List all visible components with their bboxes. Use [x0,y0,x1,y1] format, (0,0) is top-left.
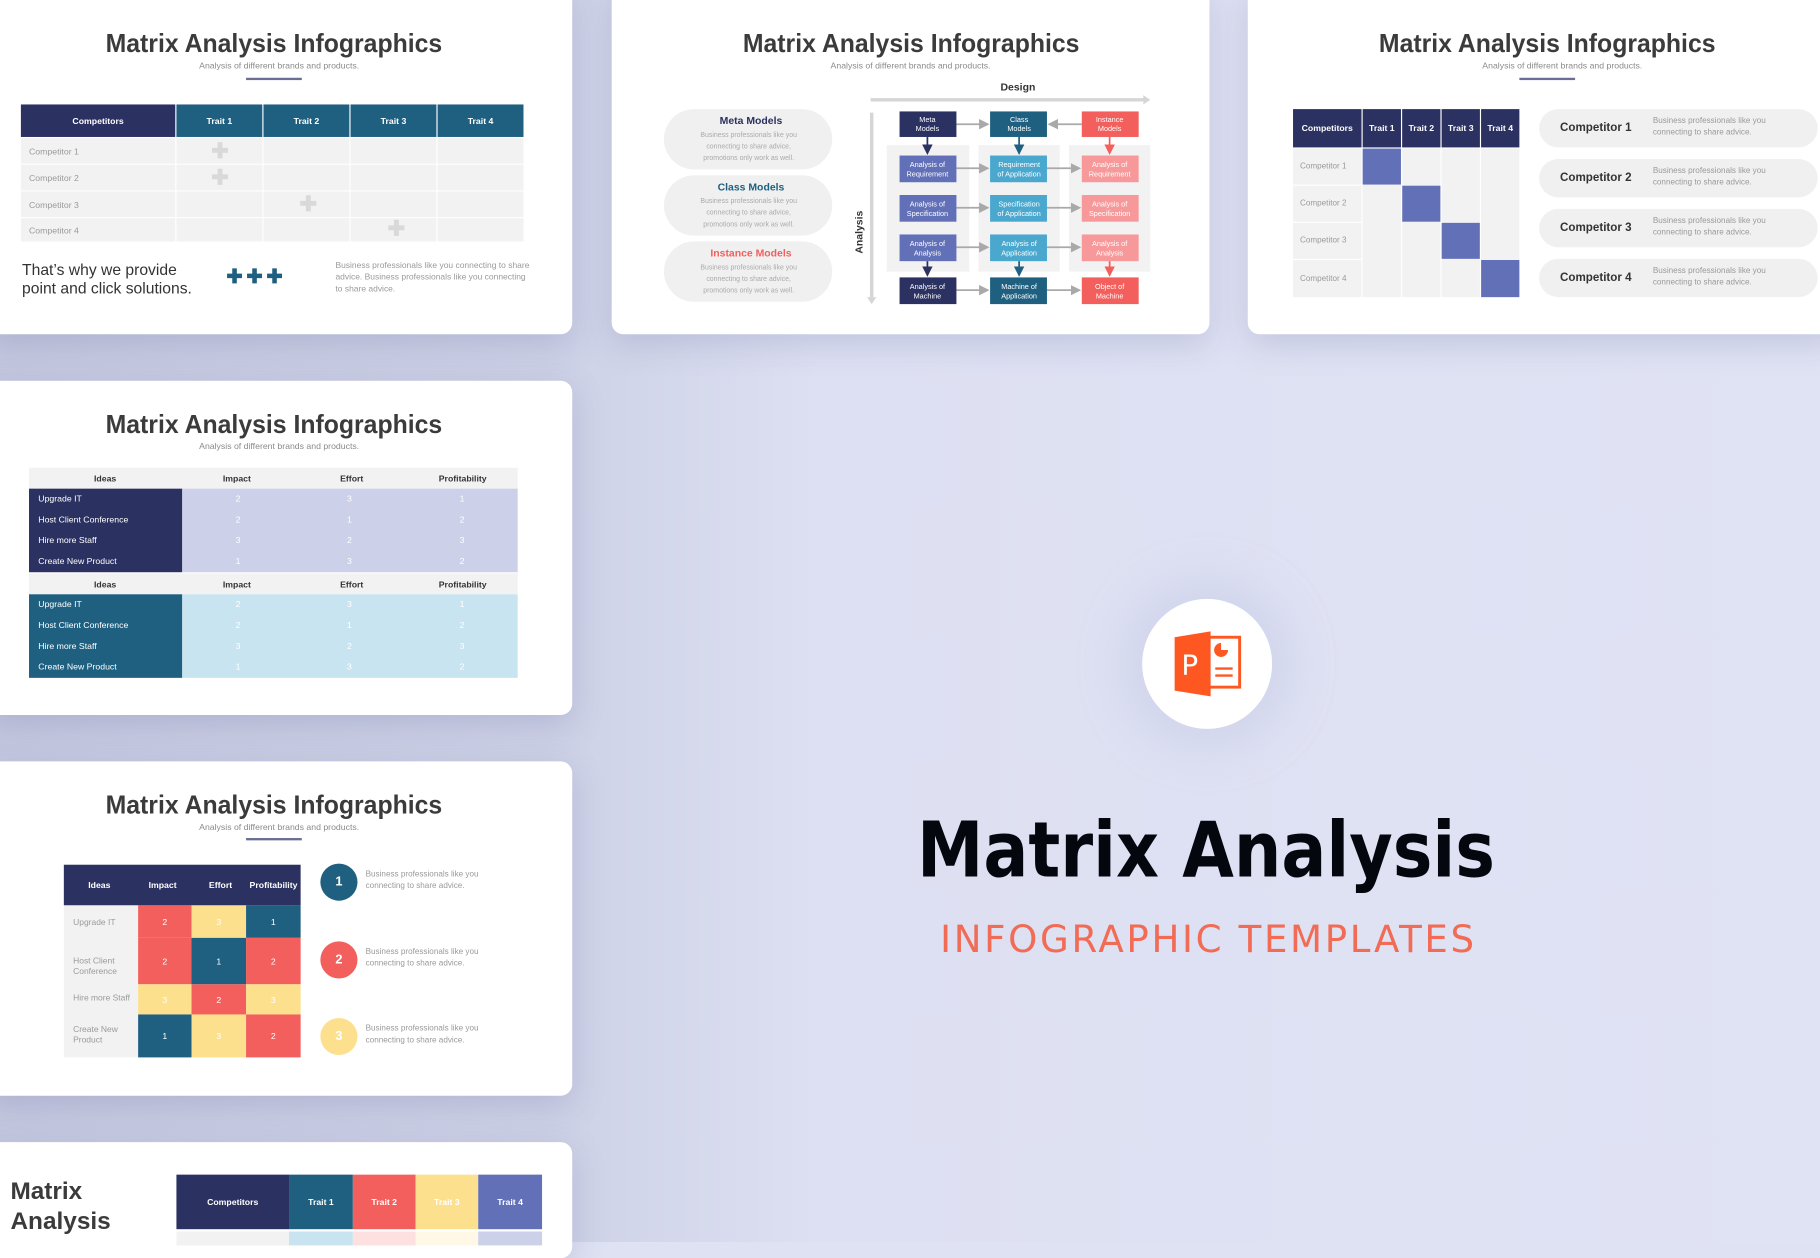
pill: Instance Models: Business professionals like you [700,264,797,271]
table: ideas teal: Create New Product [38,662,117,672]
column 3 boxes: Instance [1096,115,1123,124]
table: colored matrix: Impact [149,880,177,890]
column 2 boxes: of Application [997,169,1041,178]
table header colored: Trait 2 [371,1197,397,1207]
panel: card 5 colored ideas matrix [0,761,572,1096]
pill: Instance Models: connecting to share advice, [706,276,791,283]
column 3 boxes [1082,111,1139,304]
text: description: Business professionals like you connecting to share advice. Business professionals like you connecting to share advice. [335,260,529,294]
table: ideas navy: Effort [340,474,363,484]
pill: Meta Models: promotions only work as well. [703,155,794,162]
list: competitor pills: Business professionals like you connecting to share advice. [1653,217,1766,237]
title block [1379,30,1716,80]
table: ideas teal [29,574,518,678]
table: ideas navy: 2 [460,556,464,566]
table: ideas teal: 2 [460,662,464,672]
pill: Meta Models: connecting to share advice, [706,144,791,151]
column 3 boxes: Machine [1096,291,1123,300]
table: colored matrix: 3 [216,916,221,927]
table: ideas teal: Profitability [439,579,487,590]
column 1 boxes: Analysis of [910,282,946,291]
table: ideas navy: 3 [460,535,464,546]
title: Matrix Analysis [10,1178,111,1235]
icon: PowerPoint badge: P [1181,648,1198,681]
table: ideas teal: Ideas [94,579,116,590]
column 3 boxes: Models [1098,124,1122,133]
pill: Instance Models [664,241,832,302]
table: ideas teal: 1 [236,662,240,672]
table: colored matrix [64,864,301,1058]
table: colored matrix: Create New [73,1024,118,1034]
table: ideas teal: 2 [236,620,240,630]
table: diagonal matrix: Trait 4 [1487,123,1513,133]
column 1 boxes: Machine [914,291,941,300]
table: diagonal matrix: Trait 3 [1448,123,1474,133]
table: ideas navy: 3 [236,535,240,546]
list: numbered notes: Business professionals like you connecting to share advice. [366,948,479,968]
pill: Class Models: Class Models [718,182,785,193]
table: ideas navy: Host Client Conference [38,514,128,525]
title block: Analysis of different brands and products. [1482,60,1642,71]
table: competitors vs traits: ✚ [211,139,229,162]
text: tagline: point and click solutions. [22,280,192,297]
list: competitor pills: Business professionals like you connecting to share advice. [1653,167,1766,187]
table: colored matrix: 3 [216,1031,221,1041]
subheading: INFOGRAPHIC TEMPLATES: INFOGRAPHIC TEMPLATES [940,918,1474,961]
list: competitor pills: Business professionals like you connecting to share advice. [1653,117,1766,137]
column 3 boxes: Analysis [1096,248,1124,257]
icon: three plus signs: ✚✚✚ [226,266,286,288]
table: colored matrix: Hire more Staff [73,992,130,1003]
column 1 boxes: Requirement [907,169,948,178]
title block [106,792,442,840]
table: competitors vs traits: Trait 4 [468,115,493,126]
text: tagline: That’s why we provide [22,261,177,279]
table: colored matrix: 2 [216,994,221,1005]
table: colored matrix: 2 [162,956,167,966]
table: ideas navy: 2 [236,514,240,525]
table: colored matrix: 2 [271,1031,276,1041]
table: competitors vs traits: Trait 3 [381,115,406,126]
connectors [927,124,1110,290]
table: ideas teal: 2 [460,620,464,630]
list: numbered notes: 2 [335,953,342,967]
table header colored: Trait 4 [497,1197,523,1207]
table header colored: Trait 3 [434,1197,460,1207]
table: ideas teal: Upgrade IT [38,599,82,609]
pill: Meta Models: Business professionals like you [700,132,797,139]
table: ideas teal: 1 [347,620,352,630]
column 2 boxes: Application [1001,291,1037,300]
list: competitor pills [1539,109,1818,297]
table: ideas navy: Profitability [439,474,487,484]
column 1 boxes: Analysis [914,248,941,257]
table: competitors vs traits: Competitor 1 [29,146,79,156]
column 2 boxes: Models [1007,124,1031,133]
table: colored matrix: Effort [209,880,232,890]
column 2 boxes: of Application [997,209,1041,218]
title block [106,411,442,452]
column 1 boxes: Models [916,124,940,133]
arrow: Analysis axis: Analysis [854,210,865,254]
table: ideas navy: 1 [236,556,240,566]
table: diagonal matrix: Competitors [1302,123,1353,133]
column 1 boxes: Meta [919,115,936,124]
table: colored matrix: 2 [162,916,167,927]
pill: Class Models: connecting to share advice, [706,210,791,217]
column 1 boxes: Analysis of [910,160,946,169]
table header colored: Trait 1 [308,1197,334,1207]
table: colored matrix: 1 [271,916,276,927]
arrow: Analysis axis [854,113,876,304]
table: ideas navy: 2 [460,514,464,525]
table: ideas navy: 1 [460,493,464,504]
column 2 boxes [990,111,1047,304]
table: competitors vs traits: ✚ [299,193,317,216]
pill: Instance Models: Instance Models [710,249,792,260]
table: ideas teal: 3 [347,599,352,609]
panel: card 6 partial trait table [0,1142,572,1258]
icon: PowerPoint badge [1142,599,1272,729]
column 1 boxes: Analysis of [910,239,946,248]
title block: Analysis of different brands and products. [199,441,359,452]
table: competitors vs traits: Competitor 2 [29,172,79,183]
title block: Matrix Analysis Infographics [106,411,442,439]
table: competitors vs traits: Trait 1 [207,115,232,126]
title block: Matrix Analysis Infographics [1379,30,1716,58]
table: diagonal matrix: Trait 1 [1369,123,1395,133]
column 2 boxes: Class [1010,115,1029,124]
table: colored matrix: 3 [162,994,167,1005]
table: competitors vs traits: ✚ [211,166,229,189]
table: ideas navy: 1 [347,514,352,525]
table: ideas navy: 3 [347,493,352,504]
table: colored matrix: 1 [216,956,221,966]
column 2 boxes: Machine of [1001,282,1038,291]
column 1 boxes: Analysis of [910,200,946,209]
table: diagonal matrix: Competitor 4 [1300,275,1347,283]
column 3 boxes: Object of [1095,282,1125,291]
background column panels [887,145,1150,272]
table: ideas teal: Host Client Conference [38,620,128,630]
arrow: Design axis: Design [1001,83,1035,94]
column 3 boxes: Analysis of [1092,200,1128,209]
table header colored: Competitors [207,1197,258,1207]
title block: Matrix Analysis Infographics [106,30,442,58]
column 2 boxes: Requirement [998,160,1040,169]
column 1 boxes [900,111,956,304]
table: ideas teal: 2 [347,641,352,651]
table: competitors vs traits: Competitor 3 [29,199,79,210]
table: colored matrix: Ideas [88,880,110,890]
pill: Class Models [664,175,832,236]
title: Matrix Analysis: Matrix [10,1178,82,1205]
table: diagonal matrix: Trait 2 [1408,123,1434,133]
table: ideas teal: 3 [460,641,464,651]
table: diagonal matrix: Competitor 1 [1300,162,1347,171]
table: diagonal matrix: Competitor 2 [1300,200,1347,208]
table: ideas navy: Upgrade IT [38,493,82,504]
title block [743,30,1079,71]
table: ideas navy: Hire more Staff [38,535,97,546]
pill: Class Models: promotions only work as well. [703,221,794,228]
table: colored matrix: Conference [73,966,117,976]
table: colored matrix: 3 [271,994,276,1005]
table: colored matrix: Upgrade IT [73,917,116,927]
column 2 boxes: Analysis of [1001,239,1038,248]
title block: Matrix Analysis Infographics [106,792,442,820]
list: numbered notes: Business professionals like you connecting to share advice. [366,871,479,890]
list: competitor pills: Competitor 2 [1560,172,1632,185]
table: ideas teal: Effort [340,579,363,590]
title block [106,30,442,80]
table: ideas navy: 2 [347,535,352,546]
table: ideas teal: 1 [460,599,464,609]
column 3 boxes: Analysis of [1092,239,1128,248]
table: ideas teal: 3 [347,662,352,672]
panel: card 2 design/analysis flow [612,0,1209,334]
column 2 boxes: Application [1001,248,1037,257]
table: competitors vs traits: Competitor 4 [29,225,79,235]
table: competitors vs traits: Trait 2 [294,115,319,126]
title block: Analysis of different brands and products. [199,822,359,832]
pill: Meta Models: Meta Models [720,116,782,127]
pill: Class Models: Business professionals like you [700,198,797,205]
table: colored matrix: 1 [162,1031,167,1041]
panel: card 3 diagonal matrix [1248,0,1820,334]
text: tagline [22,261,192,297]
column 2 boxes: Specification [998,200,1040,209]
pill: Instance Models: promotions only work as well. [703,287,794,294]
list: numbered notes: Business professionals like you connecting to share advice. [366,1025,479,1045]
table: ideas navy: Impact [223,474,251,484]
list: competitor pills: Business professionals like you connecting to share advice. [1653,267,1766,287]
table: ideas navy: 2 [236,493,240,504]
title block: Analysis of different brands and products. [199,60,359,71]
table: colored matrix: Host Client [73,955,115,966]
list: numbered notes: 1 [335,875,342,889]
table: ideas navy [29,468,518,572]
table: ideas teal: Hire more Staff [38,641,97,651]
column 3 boxes: Requirement [1089,169,1131,178]
table: ideas navy: Create New Product [38,556,117,566]
table: ideas teal: 3 [236,641,240,651]
pill: Meta Models [664,109,832,169]
table: diagonal matrix: Competitor 3 [1300,237,1347,245]
list: competitor pills: Competitor 4 [1560,272,1632,284]
table: diagonal matrix [1293,109,1520,298]
arrow: Design axis [871,83,1150,104]
column 1 boxes: Specification [907,209,948,218]
flow diagram [664,83,1150,304]
panel: card 4 ideas tables [0,381,572,715]
title: Matrix Analysis: Analysis [10,1208,111,1235]
table: competitors vs traits: ✚ [388,217,405,240]
table: ideas teal: Impact [223,579,251,590]
table: competitors vs traits [20,104,524,242]
table: colored matrix: 2 [271,956,276,966]
list: numbered notes [320,864,479,1056]
table: colored matrix: Profitability [250,880,297,890]
title block: Matrix Analysis Infographics [743,30,1079,58]
table: ideas navy: 3 [347,556,352,566]
list: competitor pills: Competitor 3 [1560,222,1632,234]
list: numbered notes: 3 [335,1030,342,1043]
table header colored [176,1174,542,1246]
panel: card 1 competitor plus table [0,0,572,334]
table: competitors vs traits: Competitors [72,115,124,126]
title block: Analysis of different brands and products. [831,60,991,71]
table: ideas teal: 2 [236,599,240,609]
list: competitor pills: Competitor 1 [1560,122,1632,135]
table: ideas navy: Ideas [94,474,116,484]
column 3 boxes: Analysis of [1092,160,1128,169]
table: colored matrix: Product [73,1034,102,1045]
column 3 boxes: Specification [1089,209,1130,218]
